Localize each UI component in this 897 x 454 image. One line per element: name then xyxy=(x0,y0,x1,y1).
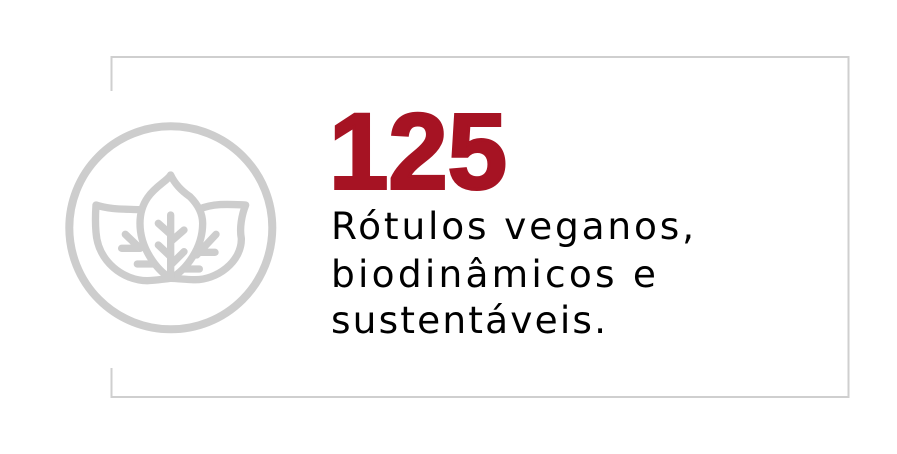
description text xyxy=(331,204,694,342)
description text: Rótulos veganos, xyxy=(331,204,694,248)
description text: sustentáveis. xyxy=(331,298,606,342)
frame: open light grey border xyxy=(112,57,848,397)
description text: biodinâmicos e xyxy=(331,252,656,296)
icon: leaves in circle xyxy=(69,126,272,329)
stat number: 125 xyxy=(329,90,507,212)
